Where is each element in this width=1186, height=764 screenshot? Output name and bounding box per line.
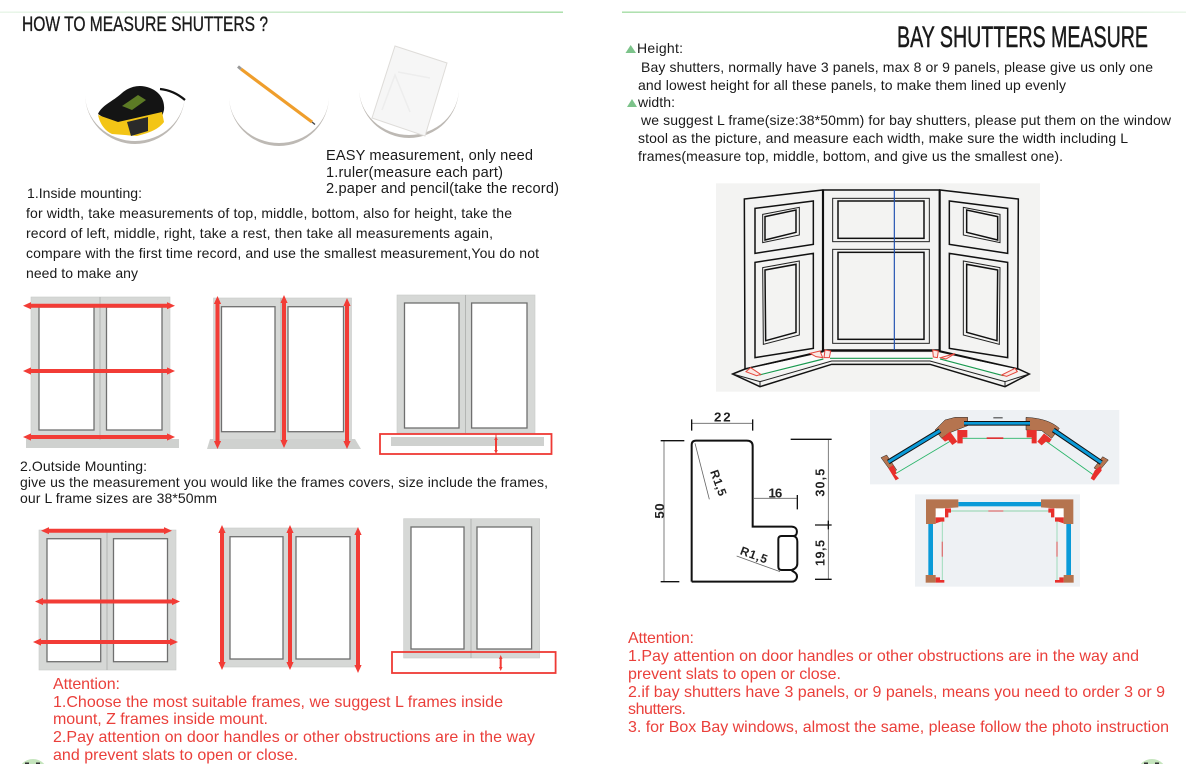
text: height and width instructions: and lowest height for all these panels, to make them lined up evenly xyxy=(638,77,1066,93)
callout: attention right page: Attention: xyxy=(628,630,694,647)
diagram: bay window drawing xyxy=(716,183,1040,392)
text: height and width instructions xyxy=(626,40,1172,164)
diagram: inside mount width measurement xyxy=(26,297,179,448)
top rule: right page xyxy=(622,12,1186,13)
diagram: outside mount width measurement xyxy=(39,530,176,670)
dimension labels: 19,5 xyxy=(814,540,828,566)
right corners xyxy=(1041,499,1074,583)
text: inside mounting: 1.Inside mounting: xyxy=(27,185,142,201)
text: inside mounting: compare with the first time record, and use the smallest measurement,You do not xyxy=(26,245,539,261)
dimension labels: 22 xyxy=(714,410,731,425)
callout: attention right page: 2.if bay shutters have 3 panels, or 9 panels, means you need to order 3 or 9 xyxy=(628,684,1165,701)
icon: pencil xyxy=(229,66,329,146)
text: outside mounting: our L frame sizes are 38*50mm xyxy=(20,490,217,506)
callout: attention right page: 3. for Box Bay windows, almost the same, please follow the photo instruction xyxy=(628,719,1169,736)
left corners xyxy=(926,499,958,583)
text: easy measurement xyxy=(326,148,559,197)
callout: attention left page: mount, Z frames inside mount. xyxy=(53,711,268,728)
measurement lines xyxy=(746,190,1017,376)
icon: sheet of paper xyxy=(359,46,459,138)
dimension labels: R1,5 xyxy=(707,468,730,498)
text: height and width instructions: Height: xyxy=(637,40,683,56)
diagram: outside mount height measurement xyxy=(222,528,358,667)
profile outline xyxy=(692,441,797,582)
dimension labels: 30,5 xyxy=(813,469,827,497)
callout: attention right page: 1.Pay attention on door handles or other obstructions are in the way and xyxy=(628,648,1139,665)
dimension lines xyxy=(661,419,832,582)
callout: attention right page xyxy=(628,630,1169,736)
dimension labels xyxy=(652,410,828,567)
text: height and width instructions: width: xyxy=(637,94,675,110)
diagram: outside mount bottom frame xyxy=(392,519,556,673)
text: outside mounting: give us the measurement you would like the frames covers, size include the frames, xyxy=(20,474,548,490)
text: height and width instructions: frames(measure top, middle, bottom, and give us the smallest one). xyxy=(638,148,1063,164)
callout: attention left page: 2.Pay attention on door handles or other obstructions are in the way xyxy=(53,729,535,746)
page badge: left xyxy=(18,759,48,764)
text: easy measurement: 1.ruler(measure each part) xyxy=(326,165,503,181)
diagram: box bay plan view xyxy=(915,494,1080,587)
callout: attention right page: shutters. xyxy=(628,701,686,718)
diagram: inside mount height measurement xyxy=(207,298,361,449)
callout: attention left page: Attention: xyxy=(53,676,120,693)
icon: tape measure xyxy=(85,86,185,144)
text: inside mounting: need to make any xyxy=(26,265,138,281)
callout: attention left page xyxy=(53,676,535,764)
top rule: left page xyxy=(0,12,563,13)
title: how to measure shutters: HOW TO MEASURE SHUTTERS ? xyxy=(22,13,268,36)
diagram: L frame profile drawing xyxy=(652,410,832,582)
dimension labels: 16 xyxy=(768,485,782,500)
text: outside mounting: 2.Outside Mounting: xyxy=(20,458,147,474)
dimension labels: R1,5 xyxy=(738,544,770,567)
page badge: right xyxy=(1137,759,1167,764)
text: height and width instructions: Bay shutters, normally have 3 panels, max 8 or 9 panels, please give us only one xyxy=(641,59,1153,75)
diagram: inside mount sill depth xyxy=(380,295,552,454)
callout: attention right page: prevent slats to open or close. xyxy=(628,666,841,683)
left wing panel xyxy=(744,190,823,369)
text: inside mounting xyxy=(26,185,539,281)
centre panel xyxy=(823,190,939,350)
text: easy measurement: 2.paper and pencil(take the record) xyxy=(326,181,559,197)
right wing panel xyxy=(940,190,1018,369)
diagram: bay plan view xyxy=(870,410,1119,484)
text: easy measurement: EASY measurement, only need xyxy=(326,148,533,164)
text: inside mounting: record of left, middle, right, take a rest, then take all measurements again, xyxy=(26,225,493,241)
window sill xyxy=(733,351,1029,387)
callout: attention left page: 1.Choose the most suitable frames, we suggest L frames inside xyxy=(53,694,503,711)
text: inside mounting: for width, take measurements of top, middle, bottom, also for height, take the xyxy=(26,205,512,221)
text: outside mounting xyxy=(20,458,548,506)
callout: attention left page: and prevent slats to open or close. xyxy=(53,747,298,764)
text: height and width instructions: stool as the picture, and measure each width, make sure the width including L xyxy=(638,130,1128,146)
text: height and width instructions: we suggest L frame(size:38*50mm) for bay shutters, please put them on the window xyxy=(640,112,1172,128)
dimension labels: 50 xyxy=(652,503,667,519)
